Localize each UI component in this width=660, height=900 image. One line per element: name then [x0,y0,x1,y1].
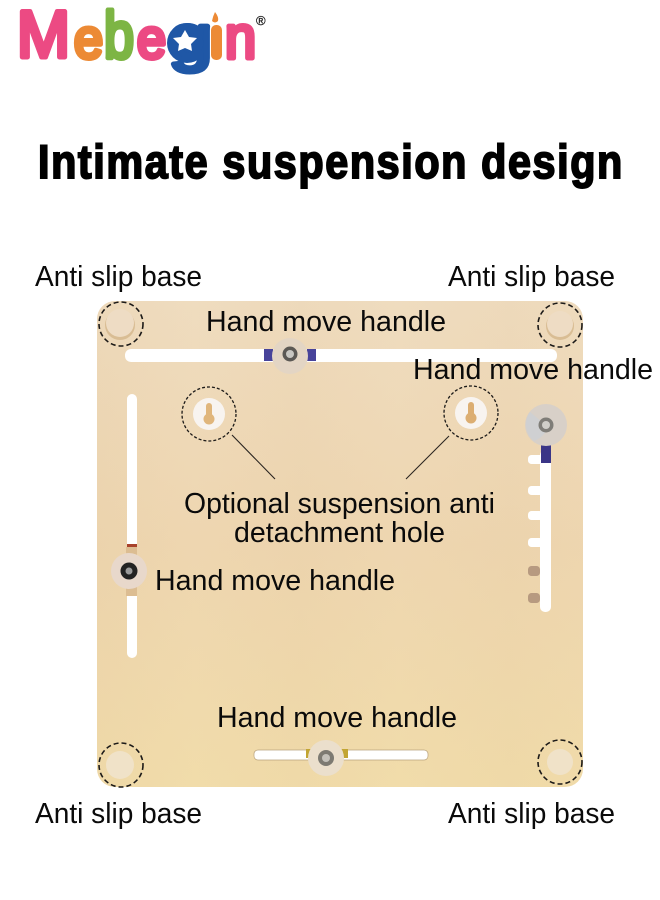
label: optional suspension hole: detachment hole [234,517,445,549]
icon: anti slip foot bottom right [538,740,582,784]
logo: Mebegin: n [225,4,256,71]
label: hand move handle top: Hand move handle [206,306,446,338]
title: Intimate suspension design [38,137,622,189]
icon: anti slip foot top left [99,302,143,346]
handle: left [111,544,147,596]
label: anti slip base bottom right: Anti slip base [448,798,615,830]
arrow: left leader line [232,435,275,479]
left slot [127,394,137,658]
handle: right [525,404,567,463]
top slot [125,349,557,362]
panel: wooden board [97,301,583,787]
logo: Mebegin: ® [256,13,266,28]
label: anti slip base top right: Anti slip base [448,261,615,293]
label: optional suspension hole [184,488,495,549]
label: anti slip base top left: Anti slip base [35,261,202,293]
logo: Mebegin [17,0,266,73]
right notched slot [528,450,551,612]
label: optional suspension hole: Optional suspension anti [184,488,495,520]
logo: Mebegin: b [104,0,134,72]
arrow: right leader line [406,436,449,479]
label: hand move handle bottom: Hand move handle [217,702,457,734]
bottom slot [254,750,428,760]
handle: bottom [306,740,348,776]
label: hand move handle right: Hand move handle [413,354,653,386]
icon: anti slip foot top right [538,303,582,347]
label: hand move handle left: Hand move handle [155,565,395,597]
icon: suspension hole right [444,386,498,440]
logo: Mebegin: e [74,7,103,70]
icon: suspension hole left [182,387,236,441]
logo: Mebegin: g [169,4,212,73]
handle: top [264,338,316,374]
label: anti slip base bottom left: Anti slip base [35,798,202,830]
icon: anti slip foot bottom left [99,743,143,787]
logo: Mebegin: e [137,7,166,70]
